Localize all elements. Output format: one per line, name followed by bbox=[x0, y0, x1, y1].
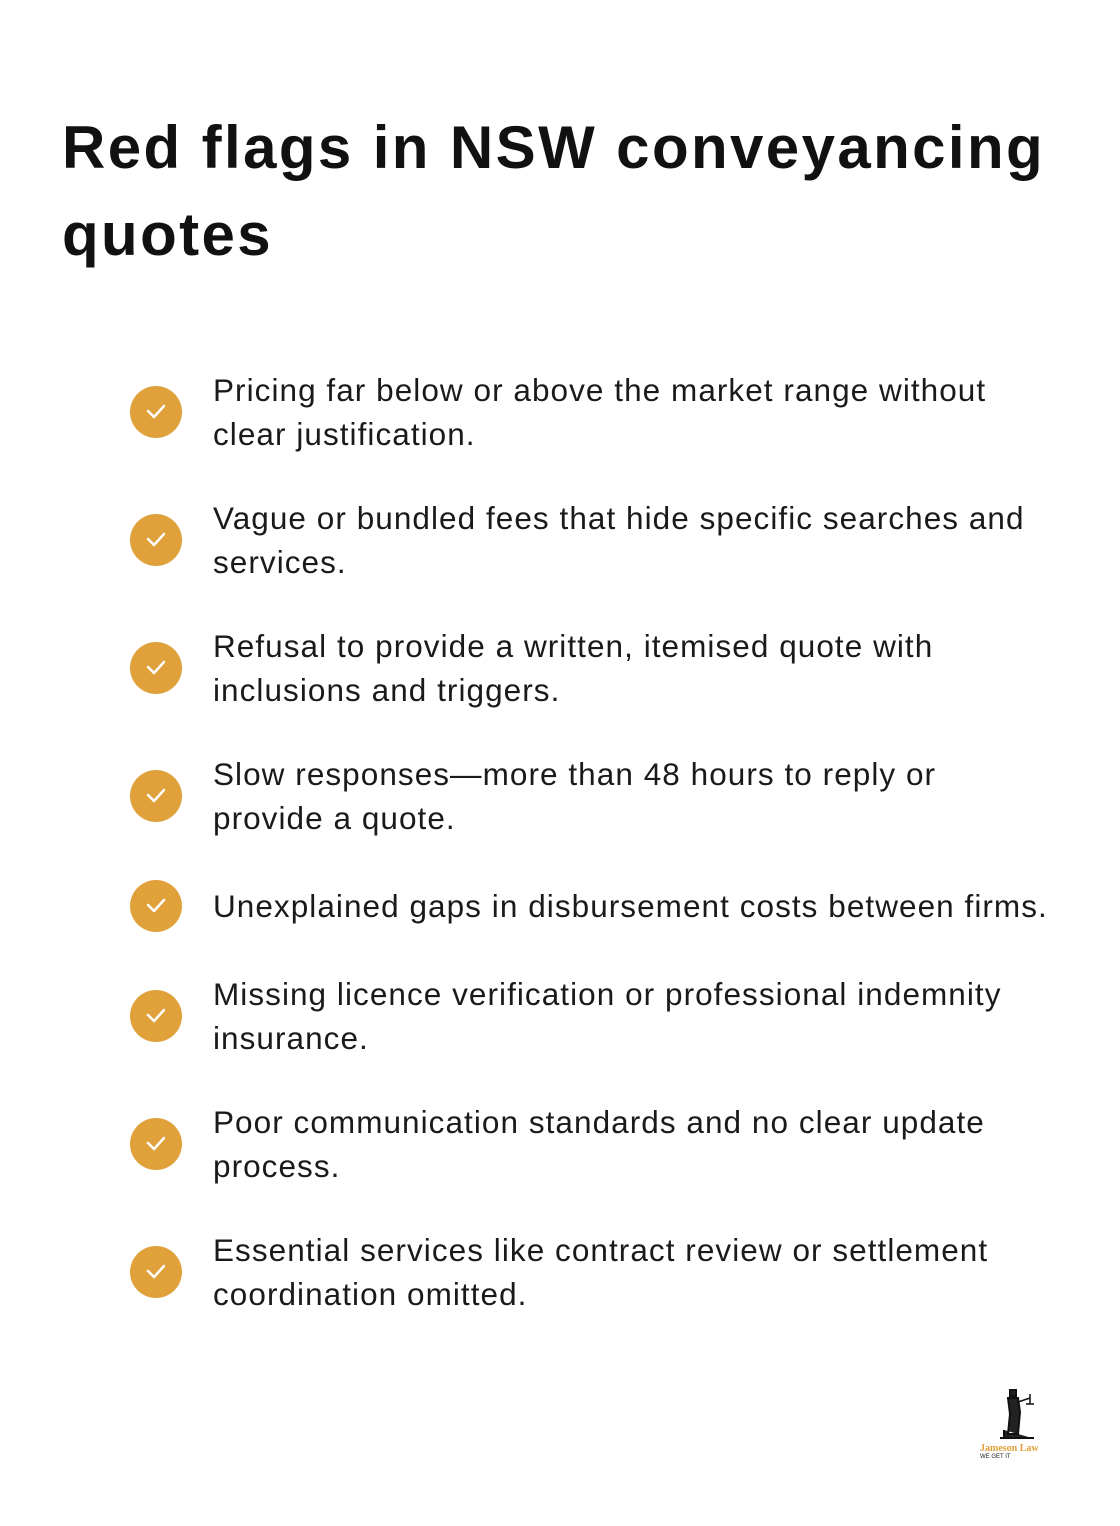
item 3: Refusal to provide a written, itemised quote with bbox=[213, 628, 933, 664]
item 7 bbox=[130, 1104, 985, 1184]
item 4: provide a quote. bbox=[213, 800, 456, 836]
item 8: coordination omitted. bbox=[213, 1276, 527, 1312]
item 1 bbox=[130, 372, 986, 452]
item 4 bbox=[130, 756, 936, 836]
item 5 bbox=[130, 880, 1048, 932]
item 2: services. bbox=[213, 544, 347, 580]
title: quotes bbox=[62, 201, 273, 268]
item 1: clear justification. bbox=[213, 416, 476, 452]
title bbox=[62, 114, 1045, 268]
title: Red flags in NSW conveyancing bbox=[62, 114, 1045, 181]
logo text: Jameson Law bbox=[980, 1443, 1039, 1454]
logo bbox=[980, 1389, 1039, 1460]
item 4: Slow responses—more than 48 hours to reply or bbox=[213, 756, 936, 792]
item 5: Unexplained gaps in disbursement costs between firms. bbox=[213, 888, 1048, 924]
item 1: Pricing far below or above the market range without bbox=[213, 372, 986, 408]
item 2 bbox=[130, 500, 1025, 580]
item 6: insurance. bbox=[213, 1020, 369, 1056]
item 3: inclusions and triggers. bbox=[213, 672, 560, 708]
item 3 bbox=[130, 628, 933, 708]
item 7: Poor communication standards and no clear update bbox=[213, 1104, 985, 1140]
item 8 bbox=[130, 1232, 988, 1312]
logo: WE GET IT bbox=[980, 1454, 1011, 1460]
icon: lady justice bbox=[1000, 1389, 1034, 1439]
item 6 bbox=[130, 976, 1002, 1056]
item 6: Missing licence verification or professional indemnity bbox=[213, 976, 1002, 1012]
item 7: process. bbox=[213, 1148, 340, 1184]
item 2: Vague or bundled fees that hide specific searches and bbox=[213, 500, 1025, 536]
item 8: Essential services like contract review or settlement bbox=[213, 1232, 988, 1268]
